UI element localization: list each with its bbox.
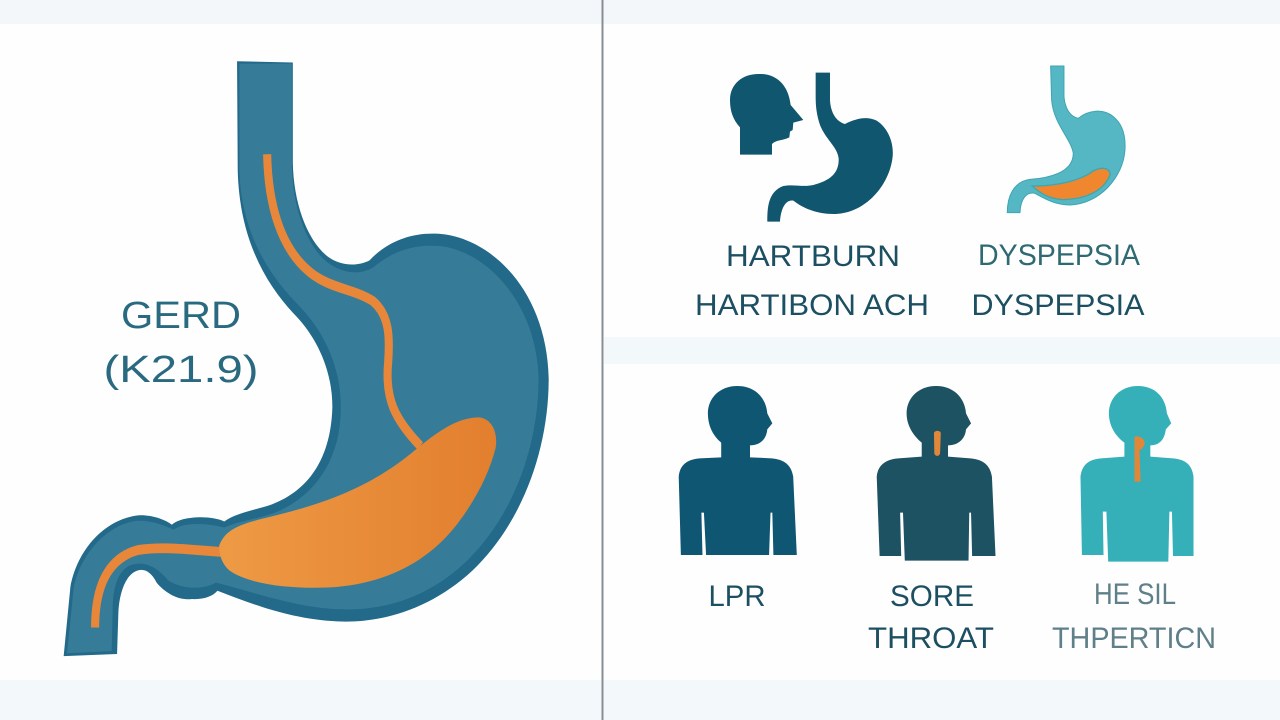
icon: person silhouette [877, 386, 996, 561]
label: dyspepsia [972, 239, 1144, 322]
heading: GERD (K21.9): (K21.9) [104, 349, 258, 391]
panel: heartburn [730, 73, 893, 222]
acid pool [219, 417, 496, 588]
icon: teal stomach [1007, 66, 1125, 213]
label: third condition [1052, 578, 1216, 655]
illustration: stomach with reflux [64, 61, 549, 656]
icon: throat highlight [934, 431, 941, 456]
label: LPR: LPR [708, 580, 766, 613]
label: dyspepsia: DYSPEPSIA [978, 239, 1140, 272]
reflux line: esophagus [267, 154, 420, 446]
icon: stomach silhouette [767, 73, 893, 222]
label: sore throat [868, 580, 994, 655]
icon: head profile [730, 74, 803, 155]
label: sore throat: SORE [890, 580, 974, 613]
icon: reflux tube [1134, 436, 1145, 482]
heading: GERD (K21.9): GERD [121, 295, 241, 337]
panel: dyspepsia icon [1007, 66, 1125, 213]
stomach inner lining [67, 64, 539, 653]
panel: third figure [1080, 386, 1194, 562]
label: third condition: THPERTICN [1052, 622, 1216, 655]
stomach outer wall [64, 61, 549, 656]
panel: sore throat figure [877, 386, 996, 561]
panel: LPR figure [679, 386, 797, 555]
label: sore throat: THROAT [868, 622, 994, 655]
icon: person silhouette [679, 386, 797, 555]
reflux line: duodenum [95, 548, 223, 628]
heading: GERD (K21.9) [104, 295, 258, 391]
icon: person silhouette [1080, 386, 1194, 562]
label: heartburn: HARTIBON ACH [695, 289, 929, 322]
label: third condition: HE SIL [1094, 578, 1176, 611]
icon: orange acid [1034, 169, 1109, 199]
label: heartburn [695, 240, 929, 322]
label: heartburn: HARTBURN [726, 240, 900, 273]
label: dyspepsia: DYSPEPSIA [972, 289, 1144, 322]
